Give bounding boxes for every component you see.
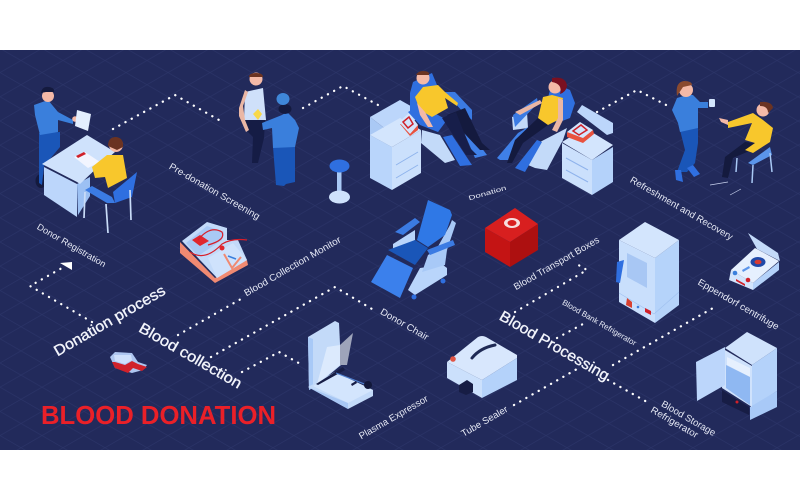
illustration: blood transport box	[485, 208, 538, 267]
heading: Donation process: Donation process	[51, 282, 169, 360]
dotted connector: donation to recovery	[597, 90, 672, 112]
dotted connector: bank refrigerator	[557, 324, 583, 338]
label: Blood Bank Refrigerator: Blood Bank Refrigerator	[561, 298, 638, 348]
chair and donor	[497, 78, 575, 172]
label: Tube Sealer: Tube Sealer	[459, 404, 510, 440]
label: Blood Collection Monitor: Blood Collection Monitor	[242, 235, 343, 299]
dotted connector: donor chair	[211, 287, 372, 357]
label: Blood Storage Refrigerator: Blood Storage	[659, 399, 717, 439]
illustration: refreshment and recovery	[672, 81, 773, 195]
cabinet	[370, 100, 425, 190]
label: Blood Storage Refrigerator: Refrigerator	[649, 405, 700, 441]
illustration: tube sealer	[447, 336, 517, 398]
title: BLOOD DONATION	[41, 402, 276, 430]
dotted connector: centrifuge	[613, 308, 713, 365]
heading: Blood Processing: Blood Processing	[496, 308, 612, 384]
dotted connector: plasma expressor	[242, 352, 304, 372]
label: Eppendorf centrifuge: Eppendorf centrifuge	[696, 277, 781, 333]
icon: stool	[329, 160, 350, 204]
illustration: blood collection monitor	[180, 222, 248, 283]
dotted connector: registration to screening	[113, 95, 219, 129]
dotted connector: transport boxes	[515, 263, 587, 312]
label: Plasma Expressor: Plasma Expressor	[357, 394, 430, 442]
illustration: blood storage refrigerator	[696, 332, 777, 420]
icon: blood bag	[110, 352, 147, 373]
illustration: pre-donation screening	[239, 72, 299, 186]
label: Donation: Donation	[468, 185, 508, 202]
label: Donor Chair: Donor Chair	[378, 307, 430, 343]
seated person	[710, 102, 773, 195]
label: Blood Transport Boxes: Blood Transport Boxes	[512, 235, 602, 293]
label: Refreshment and Recovery: Refreshment and Recovery	[628, 175, 735, 243]
seated registrant	[84, 137, 137, 233]
desk	[42, 135, 115, 217]
illustration: plasma expressor	[308, 321, 373, 409]
illustration: eppendorf centrifuge	[729, 233, 780, 290]
chair and donor	[408, 71, 490, 166]
nurse	[262, 93, 299, 186]
background panel	[0, 50, 800, 450]
illustration: donation station right	[497, 78, 613, 195]
illustration: donor registration desk	[34, 87, 137, 233]
illustration: donor chair	[371, 200, 456, 300]
label: Donor Registration: Donor Registration	[35, 222, 108, 269]
cabinet	[562, 105, 613, 195]
label: Pre-donation Screening: Pre-donation Screening	[167, 161, 262, 222]
heading: Blood collection: Blood collection	[136, 320, 245, 392]
dotted connector: storage refrigerator	[608, 380, 647, 402]
standing clerk	[34, 87, 91, 188]
dotted connector: blood collection monitor	[178, 299, 241, 335]
monitor device	[399, 113, 418, 136]
illustration: blood bank refrigerator	[616, 222, 679, 323]
arrow: donation process to registration	[30, 262, 92, 322]
standing person with cup	[672, 81, 715, 182]
dotted connector: screening to donation	[303, 86, 378, 108]
monitor device	[567, 122, 594, 143]
patient	[239, 72, 266, 163]
dotted connector: tube sealer	[514, 369, 577, 405]
illustration: donation station left	[370, 71, 490, 190]
